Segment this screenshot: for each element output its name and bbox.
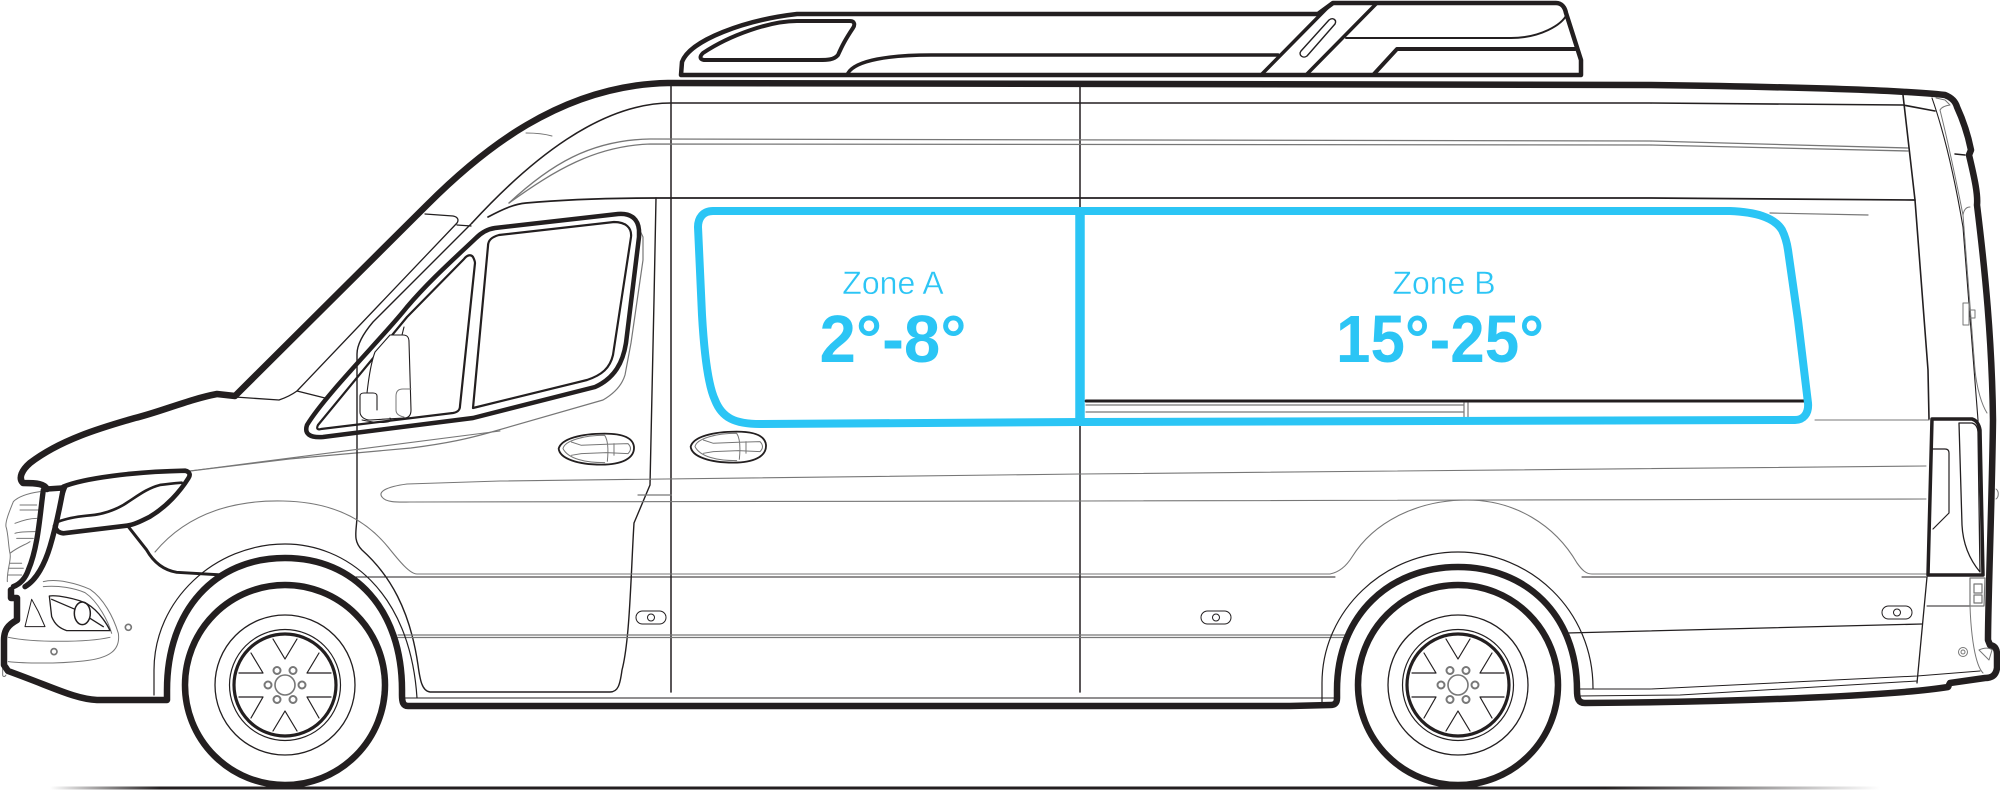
rear wheel	[1358, 585, 1558, 785]
roof unit	[681, 3, 1581, 75]
front wheel	[185, 585, 385, 785]
zone A label	[820, 265, 966, 377]
door handle front	[559, 434, 634, 465]
front details: grille, headlight, fog lamp	[3, 471, 223, 676]
body outline	[4, 83, 1997, 706]
front fender arch	[154, 544, 417, 698]
zone A label: 2°-8°	[820, 302, 966, 377]
door and body ovals	[636, 606, 1912, 624]
rear fender arch	[1322, 552, 1593, 702]
cab window	[306, 214, 639, 437]
cargo zone outline	[698, 211, 1808, 424]
van body panel lines	[155, 84, 1980, 698]
zone B label: Zone B	[1392, 265, 1496, 301]
windshield pillar	[235, 214, 471, 400]
zone B label	[1336, 265, 1544, 377]
door handle sliding	[691, 432, 766, 463]
zone B label: 15°-25°	[1336, 302, 1544, 377]
ground line	[50, 786, 1880, 790]
rear door and tail lamp	[1903, 95, 1998, 683]
wing mirror	[360, 327, 411, 422]
zone A label: Zone A	[842, 265, 944, 301]
